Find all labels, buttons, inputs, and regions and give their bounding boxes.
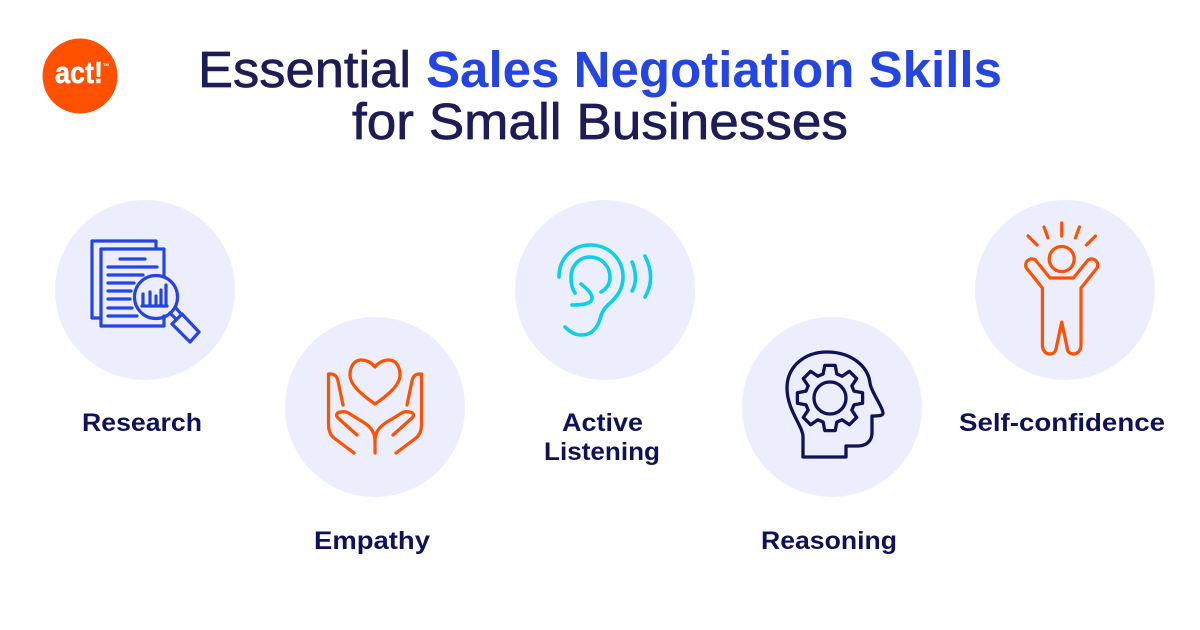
- reasoning circle: [742, 317, 922, 497]
- logo: act!: TM: [103, 62, 109, 67]
- icon: ear: [559, 245, 651, 335]
- panel: empathy: [285, 317, 465, 555]
- title: for Small Businesses: [352, 93, 848, 150]
- title: Sales Negotiation Skills: [426, 41, 1002, 98]
- title: [198, 41, 1002, 150]
- label: active listening: Listening: [544, 438, 660, 466]
- research circle: [55, 200, 235, 380]
- icon: person with raised arms: [1026, 223, 1098, 354]
- panel: reasoning: [742, 317, 922, 555]
- label: research: Research: [82, 409, 202, 437]
- icon: document and magnifier: [92, 241, 199, 342]
- label: active listening: Active: [562, 409, 643, 437]
- icon: head with gear: [787, 352, 883, 457]
- label: self-confidence: Self-confidence: [959, 409, 1165, 437]
- self-confidence circle: [975, 200, 1155, 380]
- logo: act!: act!: [55, 55, 103, 90]
- label: active listening: [544, 409, 660, 466]
- label: empathy: Empathy: [314, 527, 430, 555]
- panel: active listening: [515, 200, 695, 466]
- active listening circle: [515, 200, 695, 380]
- label: reasoning: Reasoning: [761, 527, 897, 555]
- logo: act!: [42, 38, 118, 114]
- icon: hands holding heart: [328, 360, 422, 453]
- empathy circle: [285, 317, 465, 497]
- title: Essential: [198, 41, 411, 98]
- panel: research: [55, 200, 235, 437]
- panel: self-confidence: [959, 200, 1165, 437]
